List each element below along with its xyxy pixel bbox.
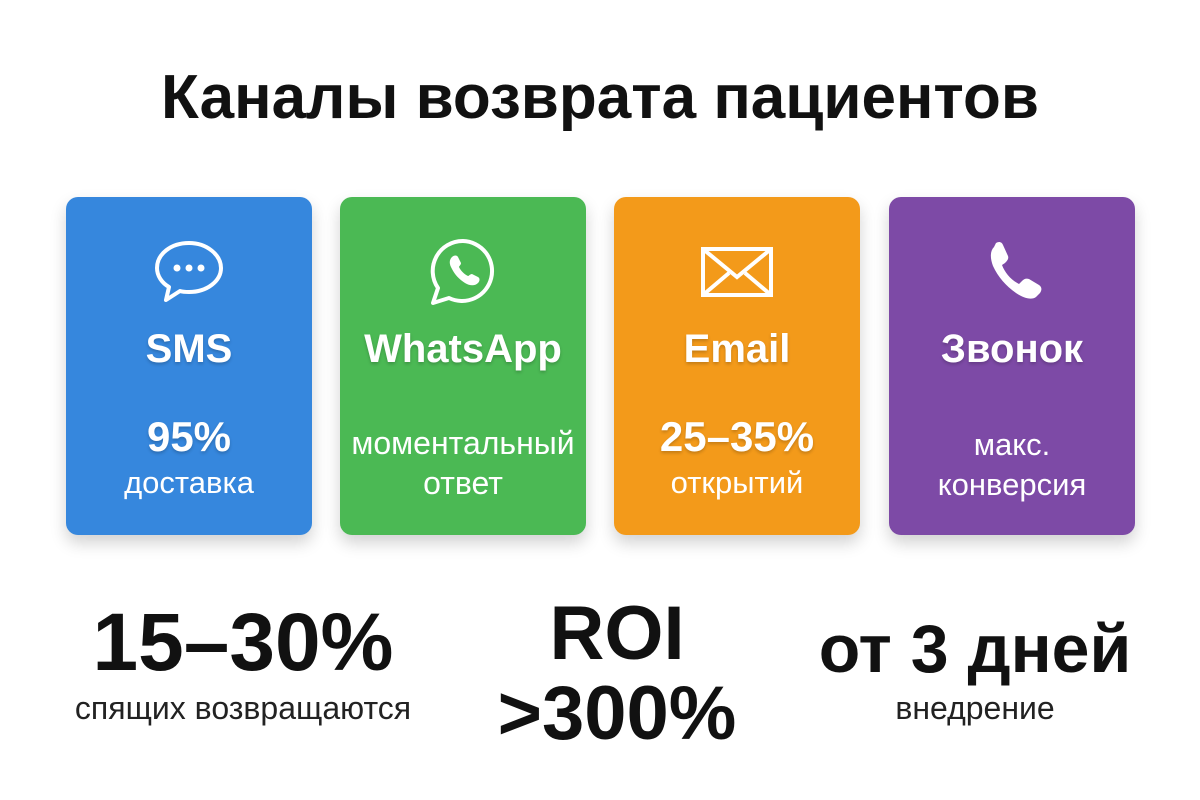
icon: phone <box>990 242 1042 299</box>
name: SMS <box>146 327 232 371</box>
stat: 25–35% <box>660 413 814 460</box>
label: ответ <box>423 465 503 501</box>
icon: whatsapp <box>430 239 494 305</box>
label <box>938 427 1086 502</box>
label: моментальный <box>351 425 575 461</box>
icon: envelope <box>701 247 773 297</box>
panel: Звонок <box>889 197 1135 535</box>
name: Email <box>684 327 790 371</box>
label: конверсия <box>938 467 1086 502</box>
big number: от 3 дней <box>819 611 1131 687</box>
big number: 15–30% <box>93 597 393 688</box>
caption: внедрение <box>895 690 1055 726</box>
title: Каналы возврата пациентов <box>161 63 1039 132</box>
caption: спящих возвращаются <box>75 690 411 726</box>
big number <box>498 591 736 756</box>
panel: Email <box>614 197 860 535</box>
label: макс. <box>974 427 1050 462</box>
panel: WhatsApp <box>340 197 586 535</box>
stat: sleeping patients <box>75 597 411 726</box>
big number: >300% <box>498 671 736 756</box>
big number: ROI <box>549 591 685 676</box>
name: Звонок <box>941 327 1083 371</box>
label: доставка <box>124 465 254 500</box>
label: открытий <box>671 465 803 500</box>
label <box>351 425 575 501</box>
icon: chat bubble <box>155 241 223 302</box>
stat: 95% <box>147 413 231 460</box>
name: WhatsApp <box>364 327 562 371</box>
stat: implementation <box>819 611 1131 726</box>
panel: SMS <box>66 197 312 535</box>
stat: ROI <box>498 591 736 756</box>
